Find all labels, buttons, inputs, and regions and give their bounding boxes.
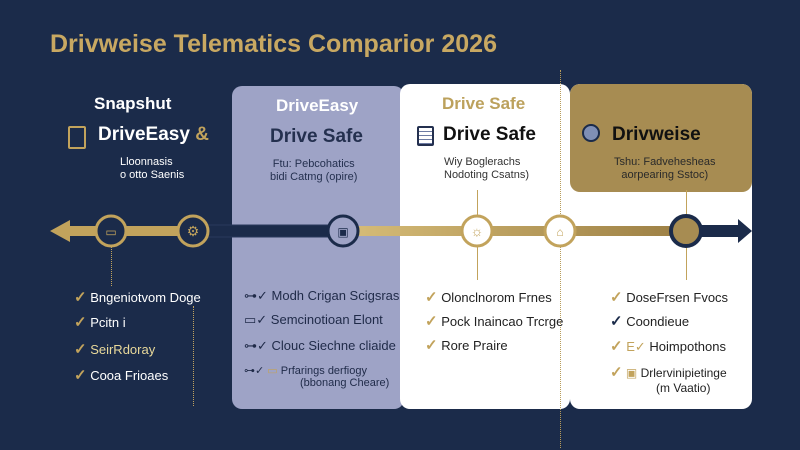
icon: globe [582, 124, 600, 142]
list: DriveEasy: ⊶✓ ▭ Prfarings derfiogy [244, 365, 367, 377]
list: Drivweise: ✓ E✓ Hoimpothons [610, 338, 726, 355]
heading: Snapshut [94, 94, 171, 113]
column: Snapshut [68, 94, 209, 181]
subheading: Drive Safe [443, 124, 536, 145]
list: Drivweise: ✓ Coondieue [610, 313, 689, 330]
description: bidi Catmg (opire) [270, 171, 357, 183]
timeline arrow: ▣ [337, 225, 349, 239]
panel: Drive Safe [400, 84, 570, 409]
list: Drivweise: (m Vaatio) [656, 381, 710, 395]
list: Snapshut: ✓ Cooa Frioaes [74, 367, 168, 384]
list: DriveEasy: ⊶✓ Modh Crigan Scigsras [244, 288, 399, 303]
description [270, 158, 357, 183]
description: Nodoting Csatns) [444, 169, 529, 181]
panel: Drivweise [570, 84, 752, 409]
timeline arrow: ⚙ [187, 223, 199, 239]
description: Wiy Boglerachs [444, 156, 520, 168]
timeline arrow: ☼ [471, 223, 483, 239]
heading: Drivweise [612, 124, 701, 145]
list: DriveEasy: ▭✓ Semcinotioan Elont [244, 312, 383, 327]
heading: DriveEasy [276, 96, 358, 115]
panel: DriveEasy [232, 86, 404, 409]
subheading: Drive Safe [270, 126, 363, 147]
list: Snapshut: ✓ SeirRdoray [74, 341, 155, 358]
list: Snapshut [74, 289, 201, 384]
dotted divider lines [111, 246, 112, 286]
list: Drivweise: ✓ DoseFrsen Fvocs [610, 289, 728, 306]
icon: device [68, 126, 86, 149]
description [444, 156, 529, 181]
list: DriveEasy: (bbonang Cheare) [300, 377, 389, 389]
description [120, 156, 184, 181]
icon: screen [417, 126, 434, 146]
description [614, 156, 716, 181]
timeline arrow: ⌂ [556, 225, 564, 239]
gold header box [570, 84, 752, 192]
timeline arrow: ▭ [105, 225, 117, 239]
subheading: DriveEasy & [98, 124, 209, 145]
list: Drivweise: ✓ ▣ Drlervinipietinge [610, 364, 727, 381]
list: Drive Safe: ✓ Rore Praire [425, 337, 508, 354]
heading: Drive Safe [442, 94, 525, 113]
list: Drive Safe: ✓ Pock Inaincao Trcrge [425, 313, 563, 330]
list: DriveEasy [244, 288, 399, 389]
list: Snapshut: ✓ Bngeniotvom Doge [74, 289, 201, 306]
description: aorpearing Sstoc) [621, 169, 708, 181]
list: Drive Safe [425, 289, 563, 354]
description: o otto Saenis [120, 169, 184, 181]
title: Drivweise Telematics Comparior 2026 [50, 30, 497, 58]
list: Drive Safe: ✓ Olonclnorom Frnes [425, 289, 552, 306]
list: Snapshut: ✓ Pcitn i [74, 314, 126, 331]
list: DriveEasy: ⊶✓ Clouc Siechne cliaide [244, 338, 396, 353]
description: Tshu: Fadvehesheas [614, 156, 716, 168]
list: Drivweise [610, 289, 728, 395]
description: Ftu: Pebcohatics [273, 158, 355, 170]
description: Lloonnasis [120, 156, 173, 168]
